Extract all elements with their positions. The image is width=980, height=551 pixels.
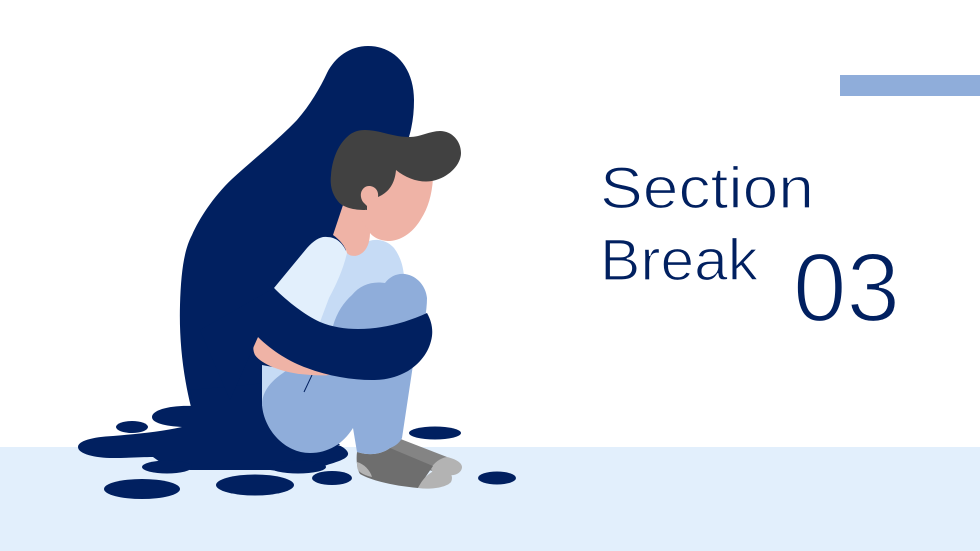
illustration: shadow figure embracing a sad boy <box>78 46 516 499</box>
raised knee <box>333 274 427 340</box>
puddle drop: bottom left <box>104 479 180 499</box>
ear <box>361 186 378 207</box>
puddle drop: bottom center <box>216 474 294 496</box>
shirt lower hem <box>262 365 300 406</box>
puddle lower-right lobe <box>270 460 326 474</box>
embracing arm <box>200 288 432 400</box>
floor <box>0 447 980 551</box>
puddle drop: near foot <box>409 426 461 440</box>
face <box>355 165 433 241</box>
shirt sleeve <box>274 237 347 325</box>
shadow figure body <box>180 46 414 445</box>
front shoe toe <box>418 469 452 489</box>
puddle drop: far right <box>478 472 516 484</box>
accent bar <box>840 75 980 96</box>
back shoe <box>385 438 447 472</box>
puddle drop: upper left <box>116 421 148 433</box>
back shoe toe <box>431 457 462 475</box>
neck <box>333 200 385 256</box>
title: Section Break <box>600 156 900 342</box>
thigh and shin <box>262 360 413 454</box>
title line 2: Break <box>600 228 759 293</box>
puddle lower-left lobe <box>142 460 192 474</box>
front shoe <box>357 448 433 488</box>
shirt front <box>318 240 404 340</box>
hand <box>253 337 330 375</box>
crease line <box>304 375 312 392</box>
front shoe heel <box>357 462 372 477</box>
section number: 03 <box>793 233 900 342</box>
shadow puddle <box>78 380 348 471</box>
puddle drop: center small <box>312 471 352 485</box>
hair <box>331 130 461 210</box>
hair below ear <box>358 201 367 210</box>
title line 1: Section <box>600 156 814 221</box>
